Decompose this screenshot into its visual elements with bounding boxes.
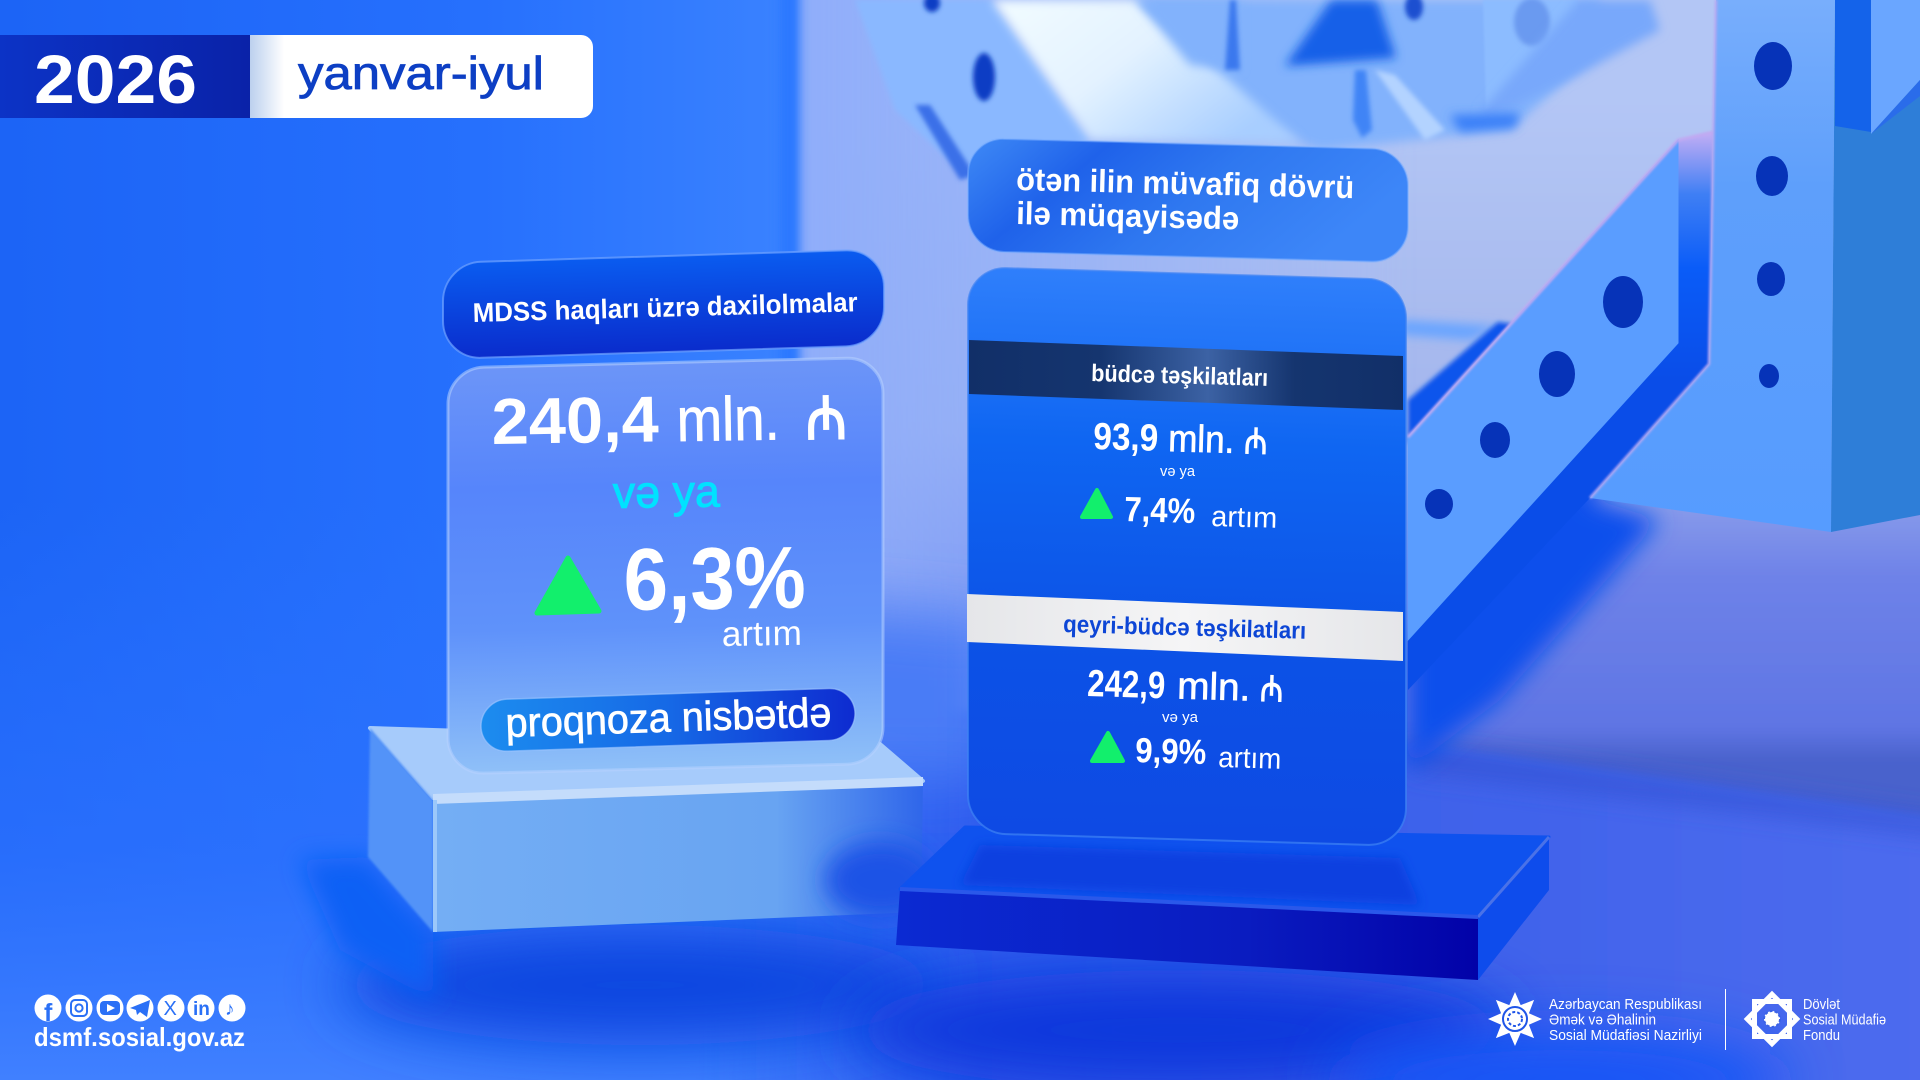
text: ministry name: Azərbaycan Respublikası	[1549, 997, 1702, 1013]
value: 93,9	[1093, 416, 1159, 460]
section header	[969, 340, 1403, 410]
growth percent: 9,9%	[1135, 731, 1207, 772]
badge: period	[250, 35, 593, 118]
card body: glass panel	[448, 357, 883, 774]
panel: forecast card	[443, 249, 884, 774]
card body: blue panel	[968, 267, 1406, 846]
growth label: artım	[1211, 501, 1278, 535]
connector text: və ya	[1160, 463, 1196, 480]
heading: comparison title	[968, 138, 1408, 263]
heading: MDSS card title	[443, 249, 884, 359]
connector text: və ya	[1162, 709, 1199, 726]
icon: diagonal beam with holes	[1408, 132, 1713, 640]
section header: büdcə təşkilatları	[1091, 360, 1269, 392]
text: fund name	[1803, 997, 1886, 1044]
wall light streaks behind beam	[1400, 320, 1520, 445]
icon: vertical pillar with holes	[1590, 0, 1920, 532]
recessed channel of the structure	[1408, 132, 1713, 690]
main value	[491, 379, 847, 458]
pill: forecast comparison: proqnoza nisbətdə	[505, 689, 832, 746]
section: budget organisations	[969, 340, 1403, 535]
icon row: social networks: f	[44, 999, 53, 1027]
section: non-budget organisations	[967, 594, 1403, 776]
badge: year	[0, 35, 252, 118]
main value: ₼	[805, 384, 847, 452]
icon row: social networks: ♪	[225, 999, 234, 1020]
ministry and fund logos	[1488, 989, 1886, 1050]
growth label: artım	[722, 614, 802, 654]
icon row: social networks	[34, 994, 246, 1027]
value: ₼	[1244, 420, 1268, 462]
text: ministry name: Əmək və Əhalinin	[1549, 1012, 1656, 1028]
growth label: artım	[1218, 742, 1282, 776]
growth percent: 6,3%	[623, 527, 806, 629]
text: ministry name: Sosial Müdafiəsi Nazirliyi	[1549, 1028, 1702, 1044]
growth percent: 7,4%	[1124, 490, 1196, 531]
icon: green up triangle	[537, 558, 599, 613]
badge: period: yanvar-iyul	[298, 47, 544, 99]
connector text: və ya	[612, 465, 721, 518]
section header	[967, 594, 1403, 661]
text: fund name: Sosial Müdafiə	[1803, 1012, 1886, 1028]
value: ₼	[1260, 668, 1284, 709]
icon row: social networks: X	[164, 998, 177, 1020]
text: ministry name	[1549, 997, 1702, 1044]
value: mln.	[1177, 666, 1251, 710]
value: 242,9	[1087, 663, 1166, 707]
heading: comparison title: ilə müqayisədə	[1016, 195, 1240, 236]
social media and website	[34, 994, 246, 1052]
top centre blurred shapes	[1136, 0, 1660, 140]
logo: fund emblem	[1747, 994, 1797, 1044]
main value: mln.	[676, 384, 780, 455]
logo: ministry star	[1488, 992, 1542, 1046]
value: mln.	[1168, 418, 1235, 462]
text: fund name: Fondu	[1803, 1028, 1840, 1044]
year badge	[0, 35, 593, 118]
website: dsmf.sosial.gov.az	[34, 1022, 245, 1052]
section header: qeyri-büdcə təşkilatları	[1063, 611, 1306, 645]
heading: MDSS card title: MDSS haqları üzrə daxilolmalar	[472, 287, 858, 328]
top left diagonal beam	[855, 0, 1090, 180]
value	[1087, 663, 1284, 710]
main value: 240,4	[491, 382, 659, 458]
value	[1093, 416, 1268, 463]
icon row: social networks: in	[193, 999, 210, 1020]
badge: year: 2026	[34, 41, 197, 118]
icon: green up triangle	[1082, 490, 1111, 517]
panel: year-on-year comparison card	[967, 138, 1408, 846]
text: fund name: Dövlət	[1803, 997, 1840, 1013]
pedestal: right dark block	[896, 827, 1549, 980]
pedestal: left light block	[368, 728, 935, 932]
icon: green up triangle	[1092, 733, 1123, 761]
heading: comparison title: ötən ilin müvafiq dövrü	[1016, 161, 1355, 205]
